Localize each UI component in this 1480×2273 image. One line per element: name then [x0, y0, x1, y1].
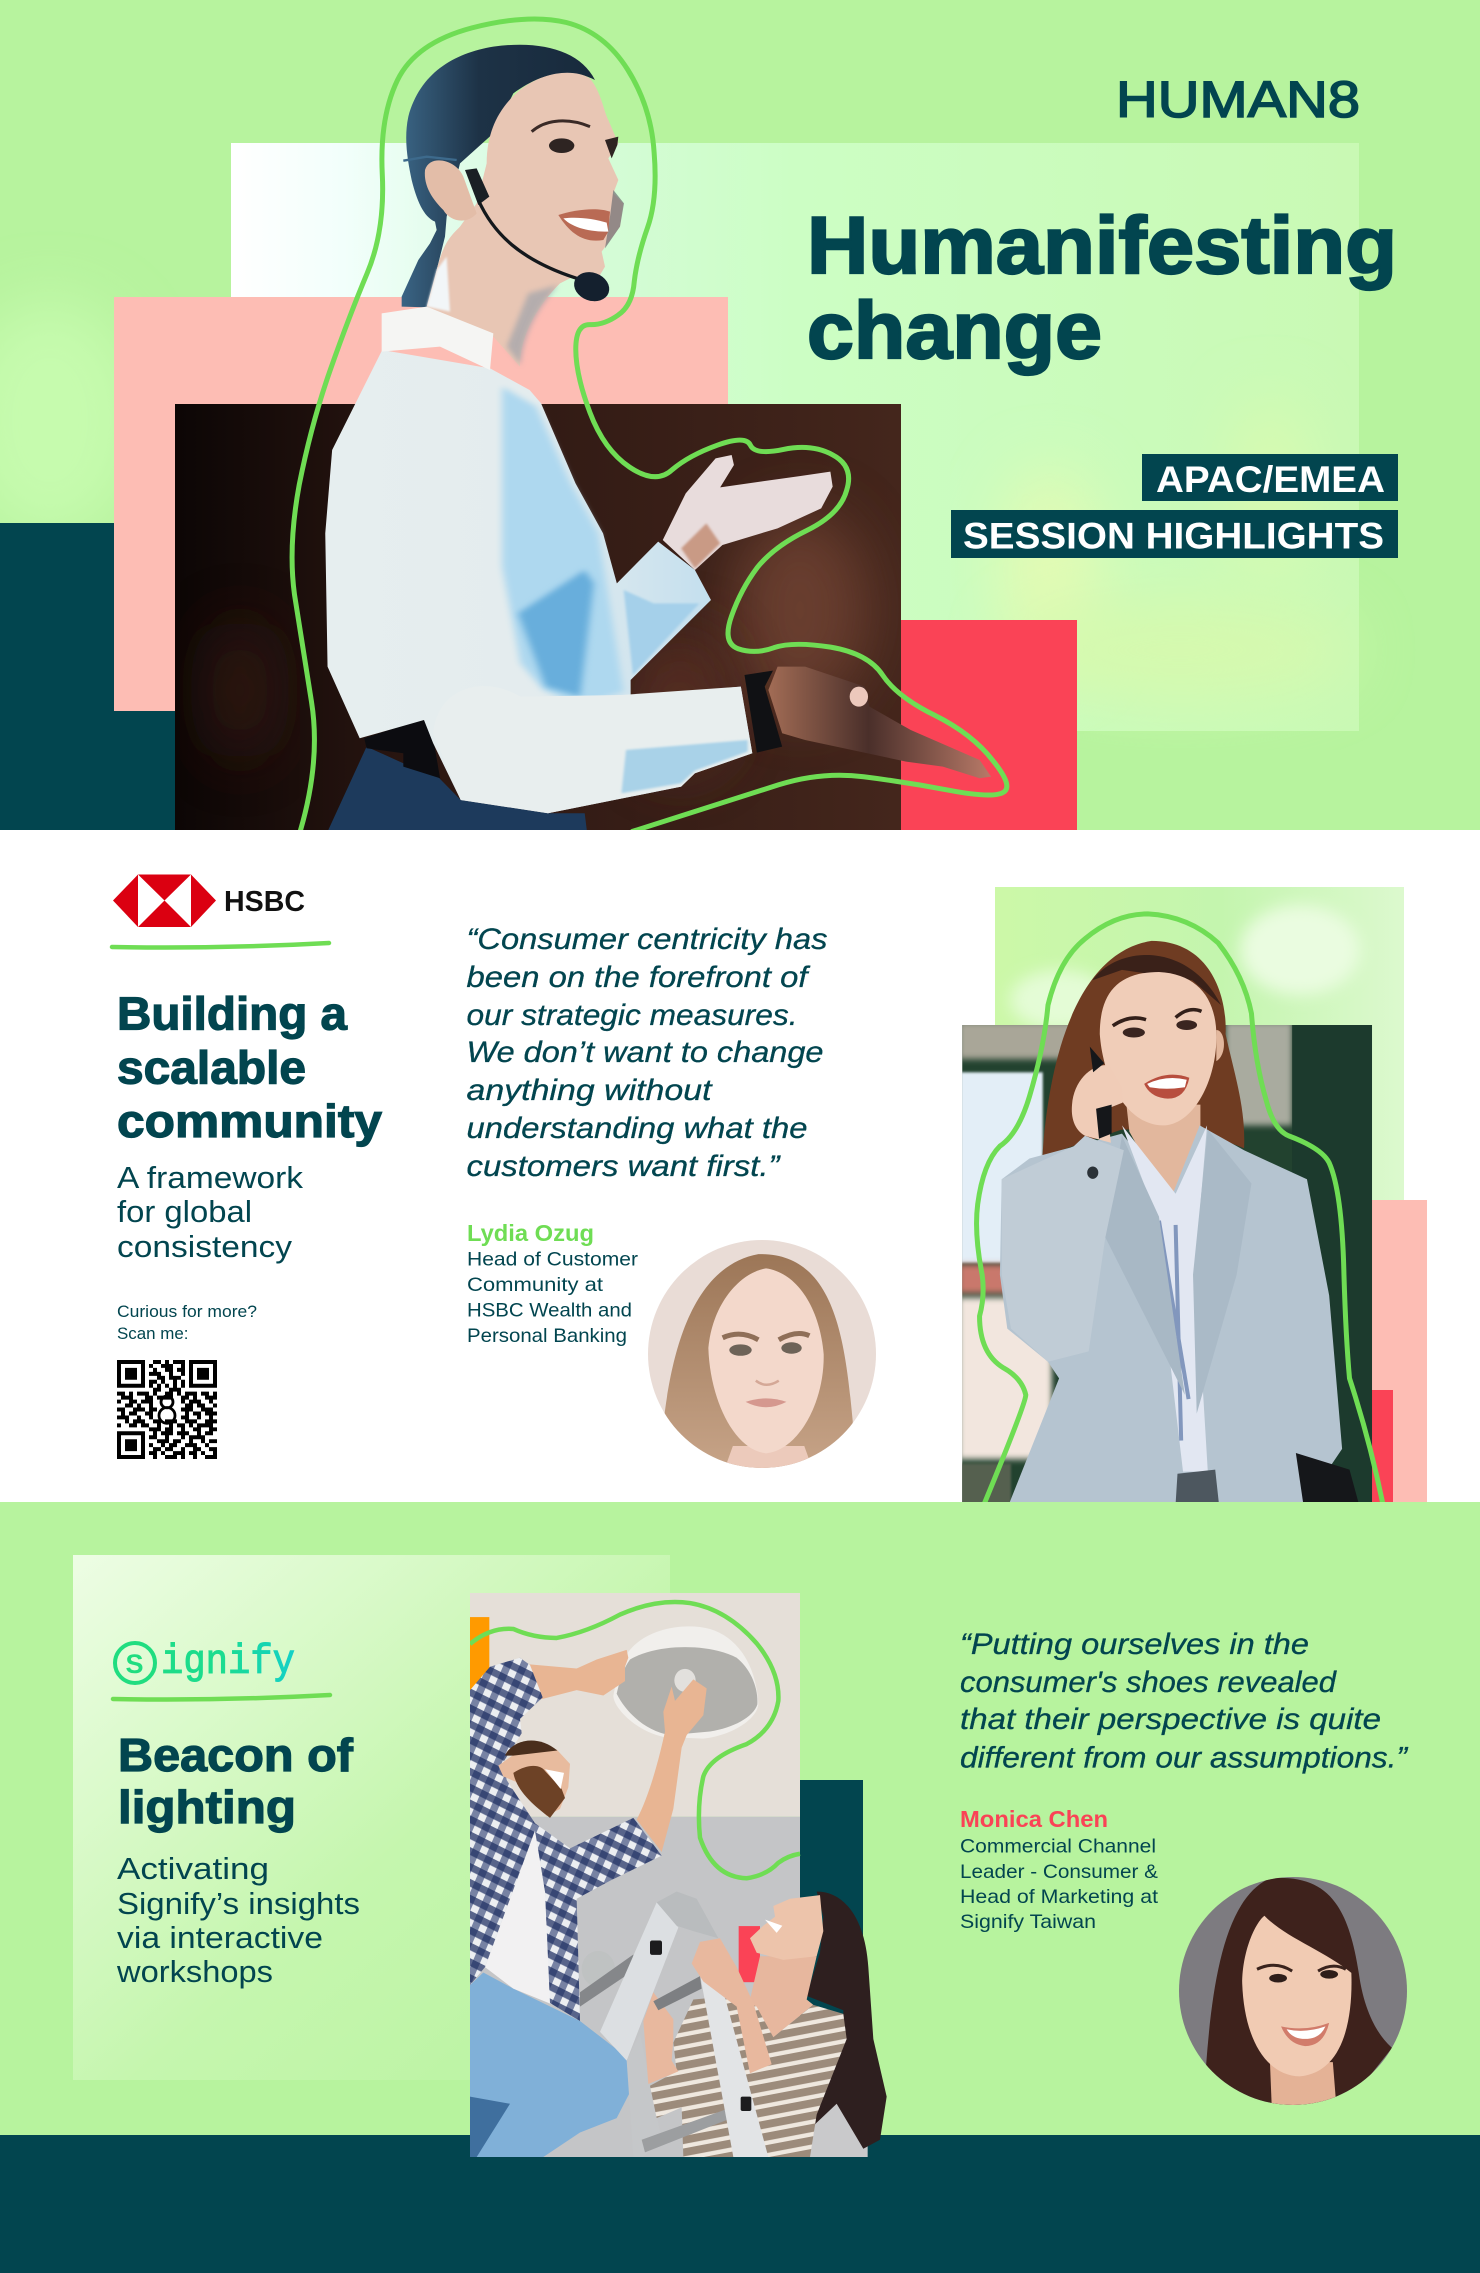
headset	[403, 157, 613, 306]
hair and braid	[402, 45, 595, 307]
speaker figure: head	[382, 45, 624, 370]
heading: Beacon of lighting: lighting	[118, 1781, 296, 1833]
subheading: workshops	[116, 1954, 273, 1989]
tag: APAC/EMEA: APAC/EMEA	[1156, 458, 1385, 500]
ladder rungs and front rail	[642, 1974, 768, 2157]
checked shirt	[470, 1658, 662, 2021]
teal block	[800, 1780, 863, 2080]
heading: Beacon of lighting	[118, 1729, 354, 1833]
audience photo backdrop	[175, 404, 901, 831]
bag	[1296, 1453, 1359, 1504]
lower hand	[768, 667, 991, 778]
photo: people changing a light bulb	[470, 1593, 887, 2157]
lower arm	[643, 1992, 678, 2084]
quote: HSBC: “Consumer centricity has	[466, 923, 828, 956]
gradient backdrop panel	[231, 143, 1359, 731]
green outline around woman	[977, 914, 1383, 1504]
reaching arm	[637, 1679, 707, 1852]
heading: Building a scalable community	[117, 988, 382, 1147]
call to scan	[117, 1302, 257, 1343]
subheading: Activating	[117, 1851, 269, 1886]
speaker credit: Monica Chen: Commercial Channel	[960, 1836, 1156, 1858]
speaker credit: Lydia Ozug: HSBC Wealth and	[467, 1300, 632, 1322]
phone	[1090, 1047, 1112, 1139]
icon: Signify logo: S	[126, 1649, 144, 1679]
subheading	[117, 1160, 304, 1264]
speaker credit: Lydia Ozug: Community at	[467, 1274, 604, 1296]
title: change	[807, 286, 1102, 376]
red block	[900, 620, 1077, 831]
neck	[1126, 1105, 1200, 1194]
striped top	[650, 1996, 847, 2157]
lapels	[1193, 1130, 1251, 1414]
QR code	[117, 1362, 217, 1457]
orange block	[470, 1617, 489, 1712]
ear	[425, 160, 477, 221]
eye and brow	[532, 121, 590, 132]
quote: HSBC	[466, 923, 828, 1183]
quote: Signify: “Putting ourselves in the	[960, 1628, 1309, 1661]
raised arm	[692, 1938, 772, 2073]
speaker credit: Lydia Ozug: Head of Customer	[467, 1248, 639, 1270]
subheading: consistency	[117, 1229, 293, 1264]
hair	[807, 1892, 887, 2149]
white shirt	[325, 350, 752, 813]
teal block	[0, 523, 176, 831]
panel: HSBC section	[0, 830, 1480, 1505]
red block	[1340, 1390, 1393, 1502]
face	[750, 1895, 823, 1960]
head	[498, 1741, 570, 1818]
wall and floor	[470, 1593, 868, 2157]
speaker credit: Monica Chen: Head of Marketing at	[960, 1886, 1159, 1908]
title	[807, 201, 1397, 376]
green outline around speaker	[292, 19, 1007, 831]
quote: Signify	[960, 1628, 1409, 1774]
quote: HSBC: customers want first.”	[466, 1150, 782, 1183]
quote: Signify: consumer's shoes revealed	[960, 1666, 1337, 1699]
quote: HSBC: understanding what the	[466, 1112, 808, 1145]
pink block	[1372, 1200, 1427, 1502]
green outline	[470, 1602, 800, 1878]
collar	[382, 307, 493, 370]
speaker credit: Lydia Ozug	[467, 1220, 639, 1347]
shirt blue shading	[502, 387, 700, 705]
woman	[643, 1892, 887, 2157]
panel: hero section	[0, 0, 1480, 832]
jeans	[328, 747, 587, 832]
mouth	[558, 209, 610, 241]
heading: Building a scalable community: community	[117, 1095, 382, 1147]
bottom band	[0, 2135, 1480, 2273]
portrait: Monica Chen	[1179, 1877, 1407, 2109]
watch	[745, 671, 782, 753]
title: Humanifesting	[807, 201, 1397, 291]
quote: Signify: that their perspective is quite	[960, 1703, 1381, 1736]
hand	[1072, 1065, 1123, 1143]
belt	[364, 718, 440, 778]
white tee	[485, 1830, 553, 2005]
Human8 logo: HUMAN8	[1116, 71, 1360, 128]
subheading: via interactive	[117, 1920, 323, 1955]
subheading: A framework	[117, 1160, 304, 1195]
quote: HSBC: We don’t want to change	[466, 1036, 824, 1069]
man	[470, 1650, 707, 2157]
icon: Signify logo: ignify	[161, 1638, 295, 1686]
heading: Building a scalable community: Building a	[117, 988, 347, 1040]
quote: HSBC: our strategic measures.	[466, 999, 798, 1032]
subheading: Signify’s insights	[117, 1886, 360, 1921]
red block	[739, 1926, 760, 1982]
quote: HSBC: anything without	[466, 1074, 713, 1107]
lamp	[613, 1626, 758, 1739]
speaker credit: Monica Chen: Monica Chen	[960, 1806, 1108, 1832]
street photo backdrop	[959, 1022, 1372, 1505]
neck and chest	[750, 1956, 817, 2037]
heading: Beacon of lighting: Beacon of	[118, 1729, 354, 1781]
portrait: Lydia Ozug	[648, 1240, 876, 1475]
raised forearm	[528, 1650, 628, 1699]
quote: Signify: different from our assumptions.”	[960, 1742, 1409, 1774]
raised hand	[663, 455, 833, 570]
trousers	[1176, 1470, 1219, 1504]
face and neck	[427, 73, 623, 367]
speaker credit: Monica Chen: Leader - Consumer &	[960, 1861, 1158, 1883]
icon: HSBC logo	[113, 874, 305, 927]
tag: session highlights: SESSION HIGHLIGHTS	[963, 514, 1384, 556]
icon: HSBC logo: HSBC	[224, 886, 305, 918]
heading: Building a scalable community: scalable	[117, 1042, 306, 1094]
hair	[1042, 941, 1244, 1156]
speaker credit: Monica Chen: Signify Taiwan	[960, 1911, 1096, 1933]
green backdrop panel	[995, 887, 1404, 1207]
subheading: for global	[117, 1194, 252, 1229]
jeans	[470, 1972, 633, 2157]
forearm	[433, 686, 752, 813]
ladder	[580, 1892, 718, 2157]
speaker credit: Lydia Ozug: Personal Banking	[467, 1325, 627, 1347]
subheading	[116, 1851, 360, 1989]
panel: Signify section	[0, 1502, 1480, 2273]
raised sleeve	[1002, 1136, 1124, 1362]
call to scan: Curious for more?	[117, 1302, 257, 1321]
pink block	[114, 297, 728, 711]
quote: HSBC: been on the forefront of	[466, 961, 810, 994]
speaker credit: Lydia Ozug: Lydia Ozug	[467, 1220, 594, 1246]
icon: Signify logo	[115, 1638, 295, 1686]
face	[1100, 972, 1216, 1125]
call to scan: Scan me:	[117, 1324, 188, 1343]
gradient backdrop panel	[73, 1555, 670, 2080]
figure: woman on phone	[959, 914, 1383, 1505]
speaker credit: Monica Chen	[960, 1806, 1159, 1933]
jacket	[1000, 1125, 1342, 1504]
speaker figure: torso and arms	[325, 350, 991, 832]
striped shirt	[1122, 1125, 1208, 1472]
